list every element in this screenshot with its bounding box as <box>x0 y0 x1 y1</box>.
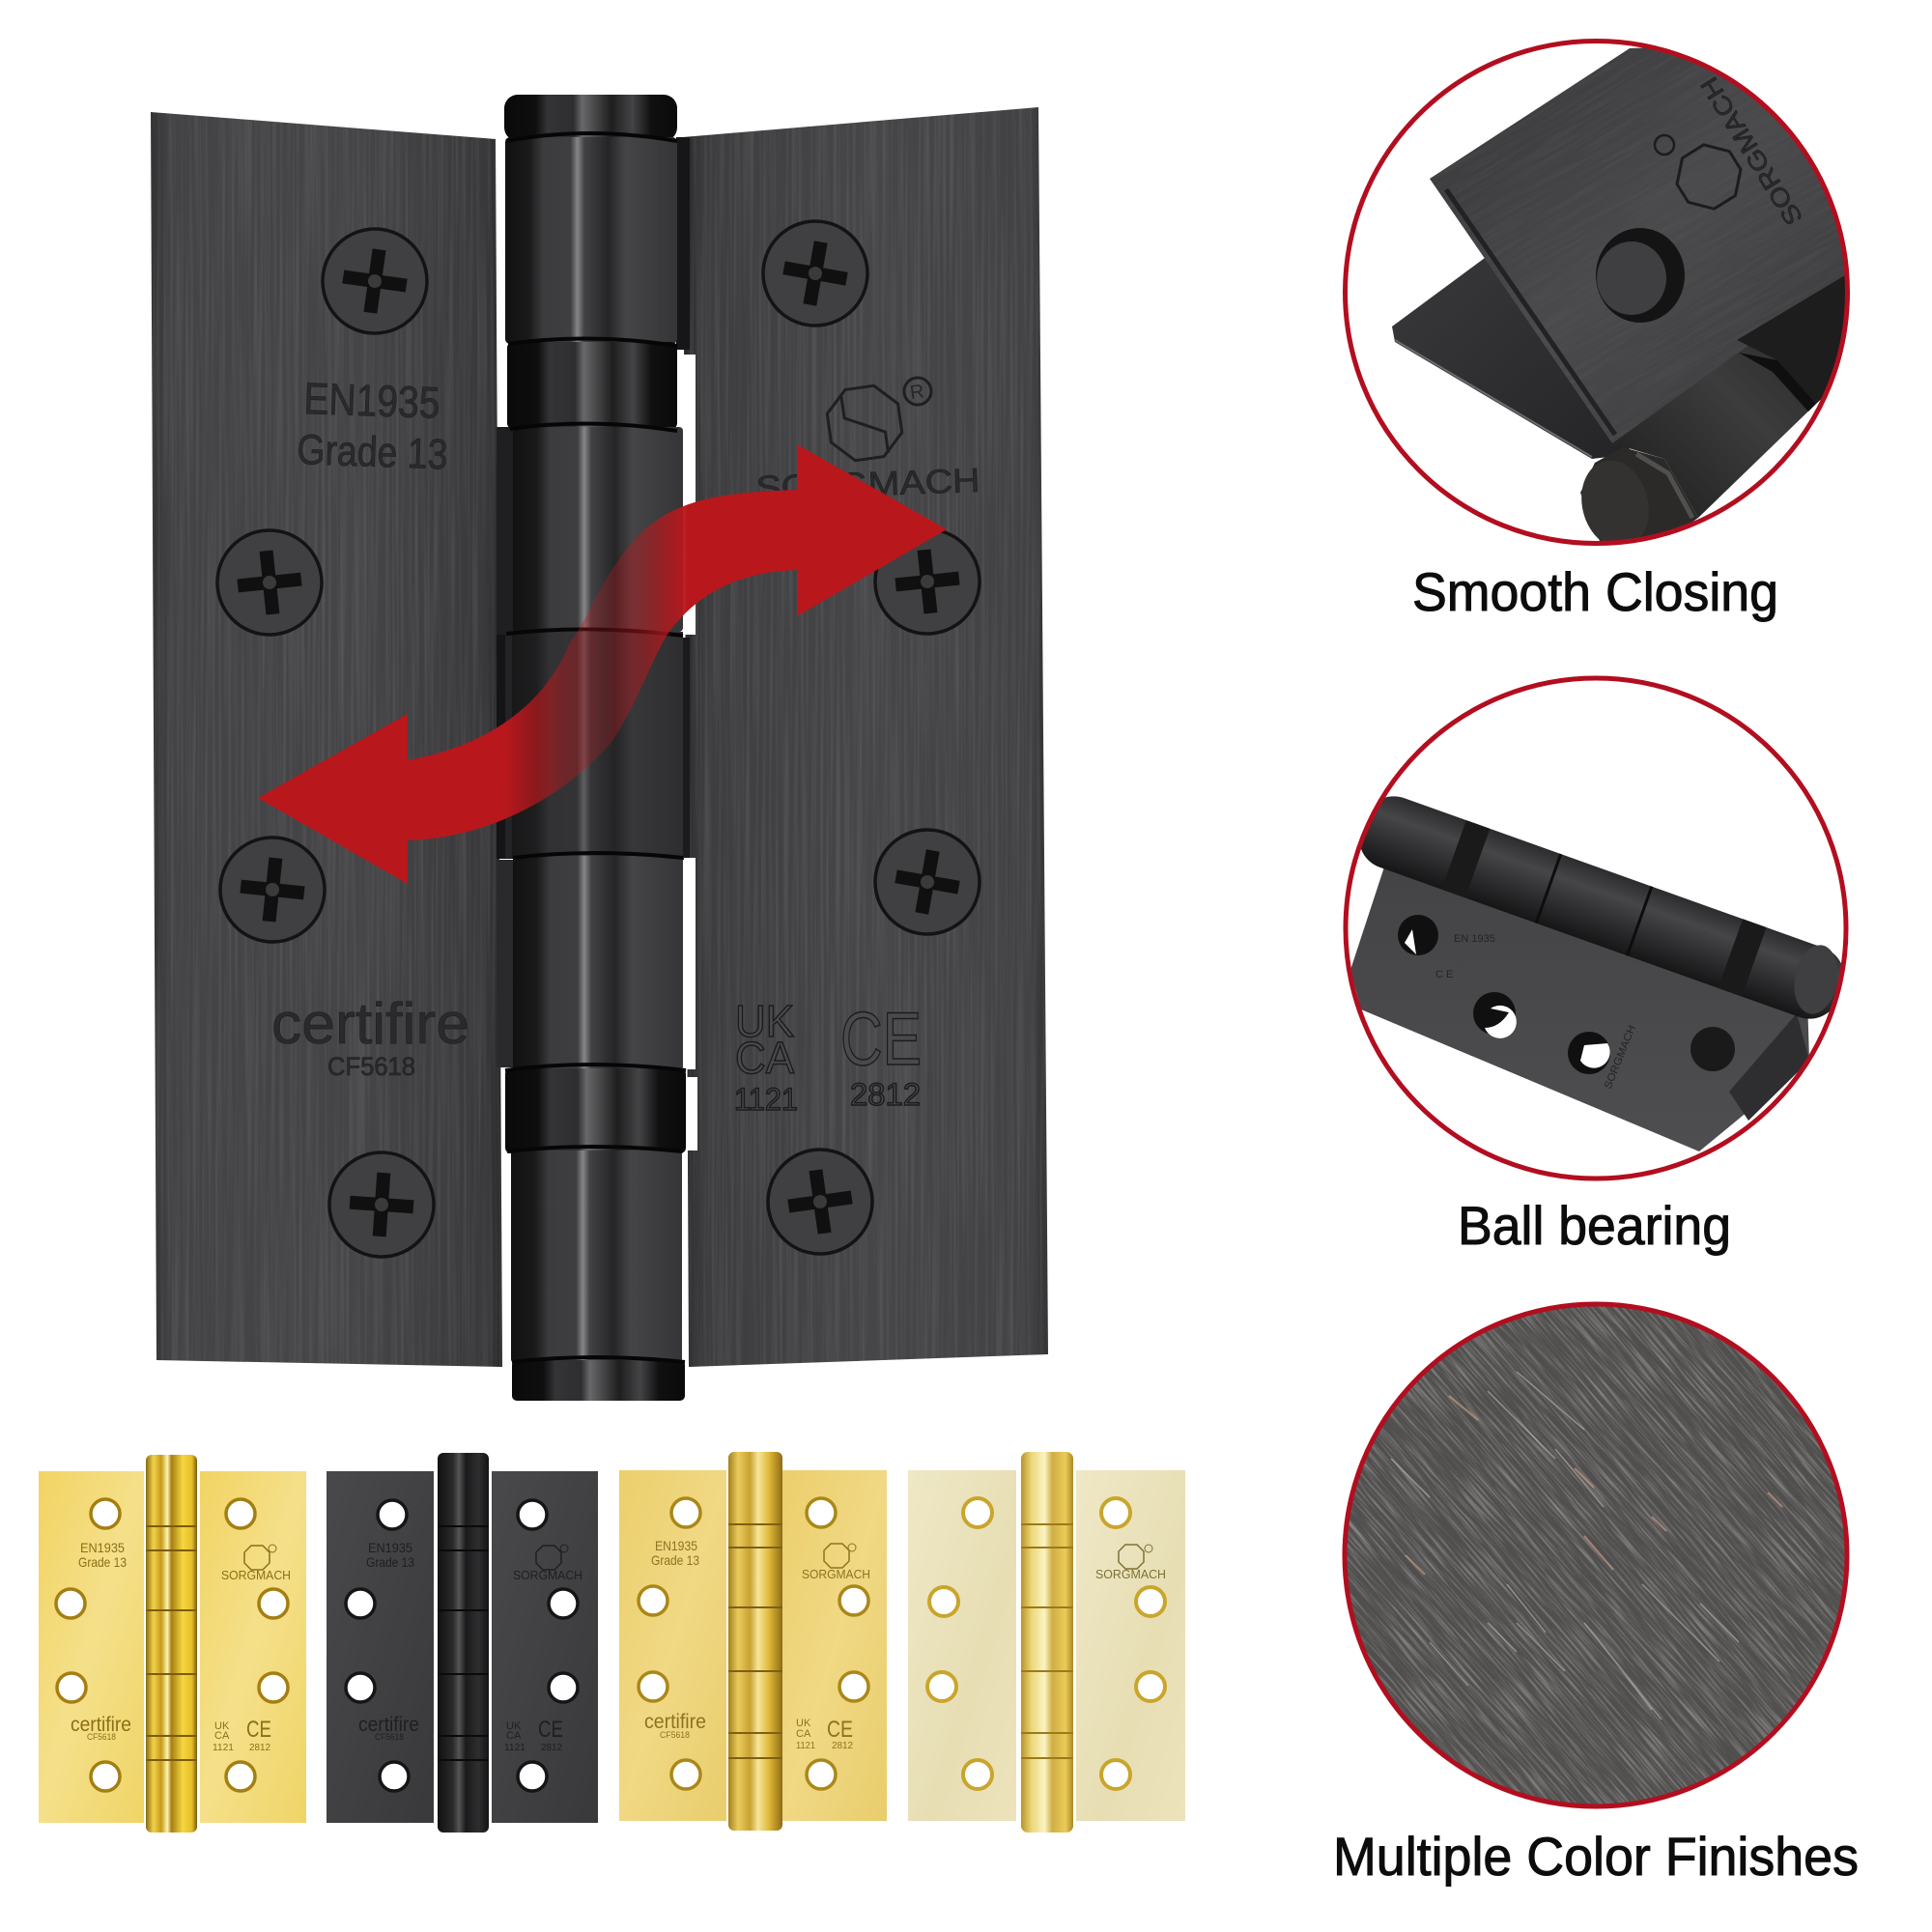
finish: polished brass hinge: 2812 <box>249 1743 270 1753</box>
right leaf plate <box>676 101 1053 1372</box>
red circle outline <box>1345 41 1847 543</box>
stamp: UKCA: UK <box>735 996 794 1046</box>
ball bearing detail photo: SORGMACH <box>1603 1024 1638 1091</box>
main hinge <box>145 95 1053 1401</box>
screw 1 <box>316 222 434 340</box>
finish: matt black hinge: CE <box>538 1717 563 1743</box>
stamp: CE: 2812 <box>850 1077 921 1112</box>
red circle outline <box>1345 1304 1847 1806</box>
finish: satin brass hinge: 2812 <box>832 1741 853 1751</box>
stamp: certifire: certifire <box>271 991 469 1056</box>
finish: satin brass hinge: SORGMACH <box>802 1567 870 1581</box>
screw 2 <box>754 213 876 334</box>
screw 4 <box>870 525 984 639</box>
brand name: SORGMACH <box>755 462 980 507</box>
ball bearing detail photo <box>1350 787 1853 1151</box>
ball bearing detail photo: C E <box>1435 969 1453 980</box>
brand logo: R <box>909 381 925 404</box>
caption: Smooth Closing <box>1412 561 1778 622</box>
finish: polished brass hinge <box>39 1455 306 1833</box>
finish: polished brass hinge: SORGMACH <box>221 1568 291 1582</box>
finish: matt black hinge: UK <box>506 1720 522 1732</box>
finish: matt black hinge: Grade 13 <box>366 1554 414 1570</box>
finish: satin brass hinge: CE <box>827 1717 853 1743</box>
finish: polished brass hinge: CA <box>214 1730 230 1742</box>
finish: matt black hinge: SORGMACH <box>513 1568 582 1582</box>
stamp: UKCA: CA <box>735 1033 794 1083</box>
ball bearing detail photo: EN 1935 <box>1454 933 1495 945</box>
left leaf plate <box>145 106 512 1372</box>
closing detail photo: SORGMACH <box>1694 71 1808 231</box>
finish: polished brass hinge: UK <box>214 1720 230 1732</box>
screw 5 <box>215 833 329 947</box>
stamp: certifire: CF5618 <box>327 1052 415 1081</box>
finish: matt black hinge: CA <box>506 1730 522 1742</box>
finish: champagne hinge: SORGMACH <box>1095 1567 1166 1581</box>
finish: matt black hinge: certifire <box>358 1714 419 1736</box>
caption: Ball bearing <box>1458 1195 1731 1256</box>
finish: satin brass hinge: CA <box>796 1728 811 1740</box>
closing detail photo <box>1392 41 1850 555</box>
stamp: CE: CE <box>840 996 922 1081</box>
stamp: UKCA: 1121 <box>734 1082 798 1117</box>
panel: smooth closing <box>1345 41 1850 622</box>
finish: champagne hinge <box>908 1452 1185 1833</box>
finish: polished brass hinge: certifire <box>71 1714 131 1736</box>
finish: polished brass hinge: 1121 <box>213 1743 234 1753</box>
finish: polished brass hinge: CE <box>246 1717 271 1743</box>
screw 7 <box>326 1149 438 1261</box>
stamp: certifire <box>271 991 469 1081</box>
panel: multiple color finishes <box>1333 1304 1859 1887</box>
stamp: EN1935 Grade 13: EN1935 <box>303 373 440 428</box>
finish: matt black hinge: EN1935 <box>368 1540 412 1555</box>
finish: polished brass hinge: Grade 13 <box>78 1554 127 1570</box>
finish: matt black hinge <box>327 1453 598 1833</box>
finish: polished brass hinge: EN1935 <box>80 1540 125 1555</box>
brushed metal texture <box>1345 1304 1847 1806</box>
stamp: EN1935 Grade 13 <box>297 373 448 478</box>
finish: satin brass hinge: UK <box>796 1718 811 1729</box>
stamp: EN1935 Grade 13: Grade 13 <box>297 426 448 478</box>
red circle outline <box>1346 678 1846 1179</box>
knuckle side slits <box>497 137 697 1151</box>
screw 6 <box>867 821 988 943</box>
caption: Multiple Color Finishes <box>1333 1826 1859 1887</box>
screw 3 <box>213 526 327 639</box>
screw 8 <box>761 1143 879 1261</box>
stamp: CE <box>840 996 922 1112</box>
finish: matt black hinge: CF5618 <box>375 1732 404 1742</box>
finish: satin brass hinge: EN1935 <box>655 1538 697 1553</box>
finish: satin brass hinge: 1121 <box>796 1741 815 1751</box>
red double arrow <box>258 444 947 884</box>
panel: ball bearing <box>1346 678 1853 1256</box>
finish: satin brass hinge: Grade 13 <box>651 1552 699 1568</box>
finish: polished brass hinge: CF5618 <box>87 1732 116 1742</box>
finish: matt black hinge: 1121 <box>504 1743 526 1753</box>
finish: satin brass hinge: CF5618 <box>660 1730 690 1740</box>
brand logo <box>824 376 939 464</box>
finish: matt black hinge: 2812 <box>541 1743 562 1753</box>
hinge knuckles <box>504 95 686 1401</box>
stamp: UKCA <box>734 996 798 1117</box>
finish: satin brass hinge: certifire <box>644 1711 706 1733</box>
finish: satin brass hinge <box>619 1452 887 1831</box>
